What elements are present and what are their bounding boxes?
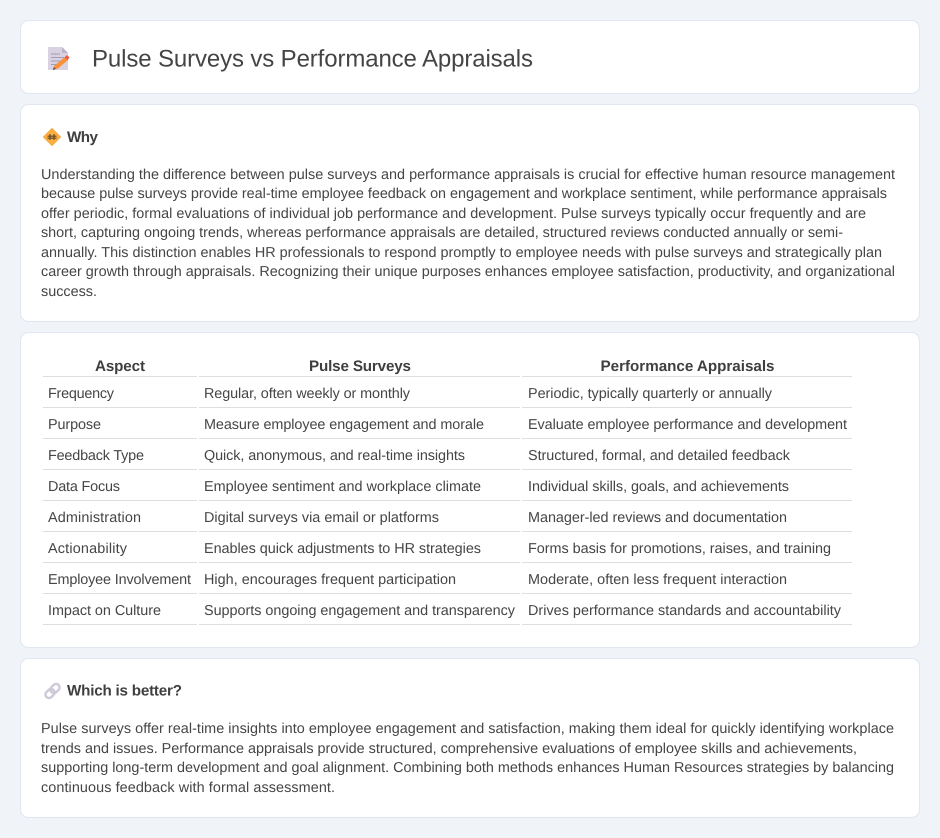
table row: actionability: Enables quick adjustments to HR strategies [204,541,481,557]
text block: which is better paragraph: supporting long-term development and goal alignment. Combining both methods enhances Human Resources strategies by balancing [41,760,894,776]
table row: administration: Digital surveys via email or platforms [204,510,439,526]
table row: data focus: Data Focus [48,479,120,495]
table row: feedback type: Structured, formal, and detailed feedback [528,448,791,464]
text block: why paragraph: because pulse surveys provide real-time employee feedback on engagement and workplace sentiment, while performance appraisals [41,186,887,202]
panel: comparison table [20,332,920,648]
text block: which is better paragraph: Pulse surveys offer real-time insights into employee engagement and satisfaction, making them ideal for quickly identifying workplace [41,721,894,737]
text block: why paragraph: career growth through appraisals. Recognizing their unique purposes enhances employee satisfaction, productivity, and organizational [41,264,895,280]
panel: title header [20,20,920,94]
table row: purpose: Measure employee engagement and morale [204,417,484,433]
table row: feedback type [43,448,852,470]
table row: employee involvement: Moderate, often less frequent interaction [528,572,787,588]
table row: employee involvement [43,572,852,594]
icon: warning diamond [44,128,60,146]
table row: impact on culture [43,603,852,625]
text block: why paragraph: Understanding the difference between pulse surveys and performance appraisals is crucial for effective human resource management [41,167,895,183]
table header row: Aspect [95,358,145,375]
table row: administration [43,510,852,532]
table row: frequency: Regular, often weekly or monthly [204,386,411,402]
icon: chain link [44,682,61,700]
text block: why paragraph: offer periodic, formal evaluations of individual job performance and development. Pulse surveys typically occur frequently and are [41,206,866,222]
icon: memo with pencil [48,47,70,70]
table row: impact on culture: Drives performance standards and accountability [528,603,842,619]
table header row: Pulse Surveys [309,358,411,375]
table row: actionability: Forms basis for promotions, raises, and training [528,541,831,557]
table row: frequency: Frequency [48,386,115,402]
table row: actionability [43,541,852,563]
table row: impact on culture: Supports ongoing engagement and transparency [204,603,516,619]
text block: why paragraph: short, capturing ongoing trends, whereas performance appraisals are detailed, structured reviews conducted annually or semi- [41,225,843,241]
panel: which is better [20,658,920,818]
table row: impact on culture: Impact on Culture [48,603,161,619]
text block: why paragraph: annually. This distinction enables HR professionals to respond promptly to employee needs with pulse surveys and strategically plan [41,245,882,261]
table row: purpose [43,417,852,439]
table row: employee involvement: High, encourages frequent participation [204,572,456,588]
heading: why: Why [67,129,99,146]
table row: administration: Manager-led reviews and documentation [528,510,787,526]
panel: why [20,104,920,322]
table row: actionability: Actionability [48,541,128,557]
table row: feedback type: Quick, anonymous, and real-time insights [204,448,465,464]
table row: data focus [43,479,852,501]
table header row [43,358,852,377]
title: Pulse Surveys vs Performance Appraisals [92,46,533,72]
table header row: Performance Appraisals [600,358,774,375]
text block: which is better paragraph [41,721,894,796]
table row: administration: Administration [48,510,141,526]
table row: data focus: Employee sentiment and workplace climate [204,479,481,495]
text block: which is better paragraph: continuous feedback with formal assessment. [41,780,335,796]
table row: purpose: Evaluate employee performance and development [528,417,847,433]
table row: frequency: Periodic, typically quarterly or annually [528,386,773,402]
text block: why paragraph [41,167,895,300]
heading: which is better: Which is better? [67,682,182,700]
text block: why paragraph: success. [41,284,97,300]
text block: which is better paragraph: trends and issues. Performance appraisals provide structured, comprehensive evaluations of employee skills and achievements, [41,741,857,757]
table row: feedback type: Feedback Type [48,448,144,464]
table row: data focus: Individual skills, goals, and achievements [528,479,789,495]
table row: employee involvement: Employee Involvement [48,572,191,588]
table row: purpose: Purpose [48,417,101,433]
table row: frequency [43,386,852,408]
